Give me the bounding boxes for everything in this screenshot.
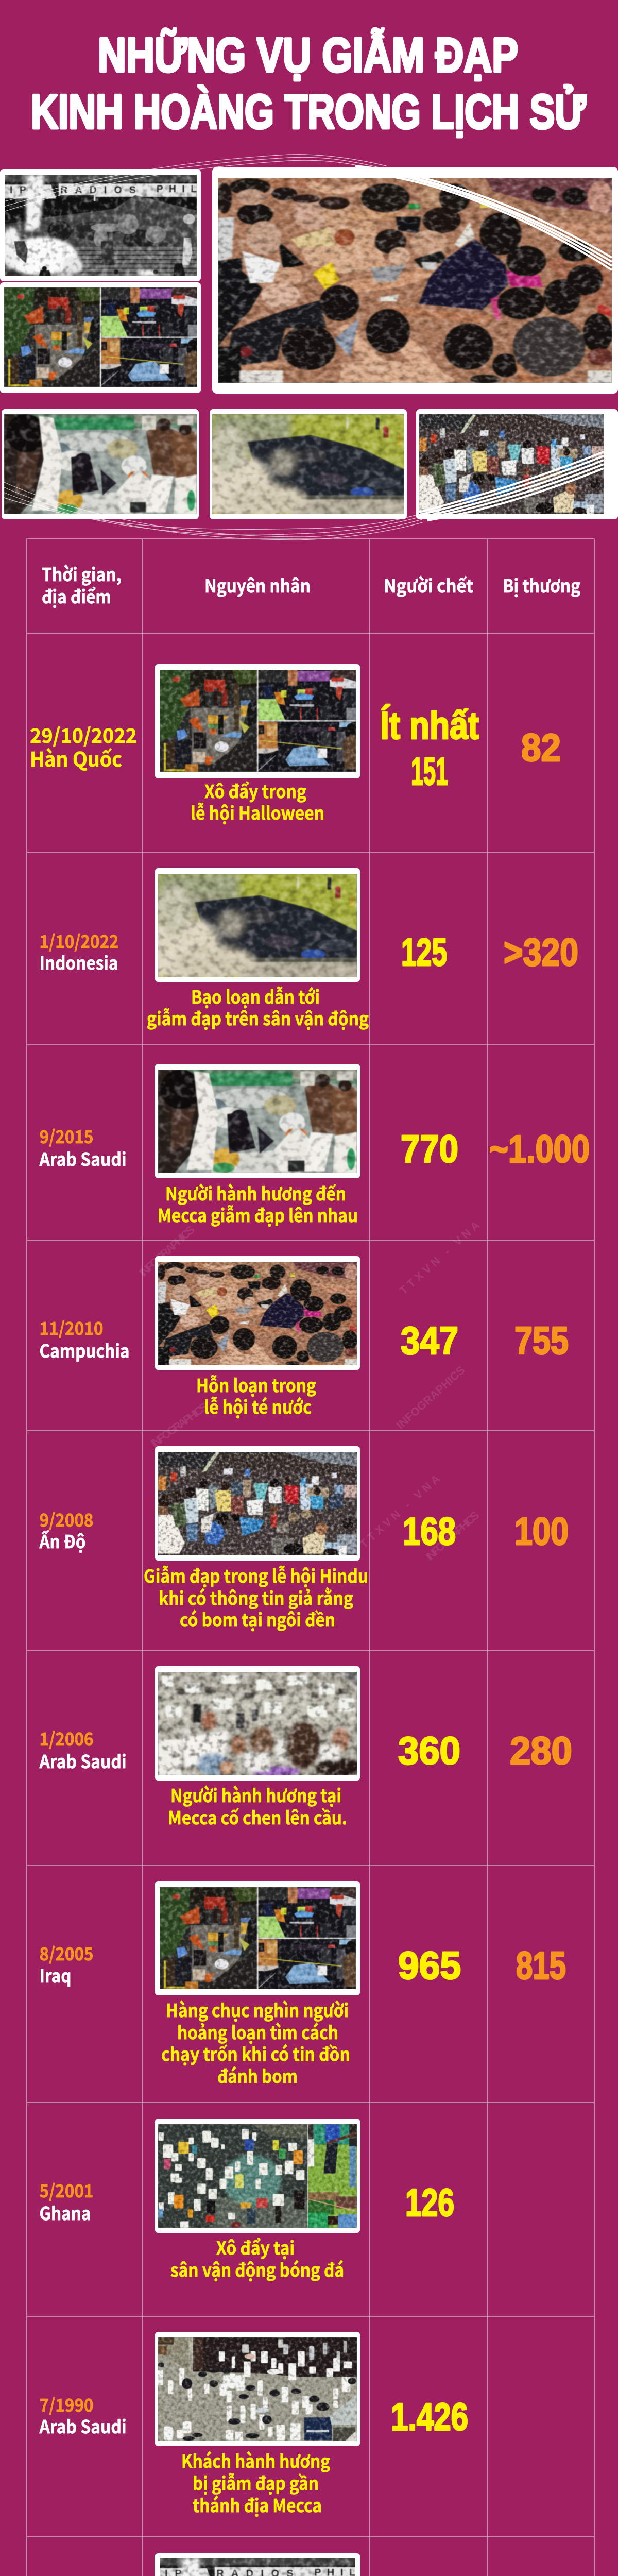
row: 11/2010 Campuchia: 347: [401, 1319, 458, 1362]
photo: [155, 1064, 360, 1178]
row: 7/1990 Arab Saudi: 1.426: [391, 2395, 468, 2438]
watermarks: INFOGRAPHICS: [137, 1223, 197, 1279]
photo: India crowd: [416, 409, 618, 519]
row: 5/2001 Ghana: Xô đẩy tại: [216, 2234, 295, 2260]
row: 8/2005 Iraq: 8/2005: [39, 1940, 94, 1966]
row: 9/2015 Arab Saudi: ~1.000: [489, 1127, 590, 1171]
photo: [155, 2553, 360, 2576]
table header: [42, 561, 580, 609]
row: 9/2008 Ấn Độ: [39, 1446, 569, 1632]
row: 8/2005 Iraq: [39, 1881, 566, 2089]
row: 1/2006 Arab Saudi: Người hành hương tại: [170, 1782, 341, 1808]
row: 5/2001 Ghana: 126: [405, 2181, 454, 2224]
photo: Mecca pilgrims: [2, 409, 199, 519]
row: 7/1990 Arab Saudi: Arab Saudi: [39, 2413, 126, 2439]
row: 8/2005 Iraq: 815: [516, 1944, 566, 1987]
photo: [155, 2332, 360, 2446]
row: 29/10/2022 Hàn Quốc: [30, 664, 561, 825]
row: 9/2015 Arab Saudi: Mecca giẫm đạp lên nhau: [158, 1201, 358, 1228]
photo: [155, 664, 360, 778]
row: 29/10/2022 Hàn Quốc: lễ hội Halloween: [191, 799, 324, 825]
row: 7/1990 Arab Saudi: [39, 2332, 468, 2518]
photo collage: [0, 167, 618, 519]
row: 9/2008 Ấn Độ: khi có thông tin giả rằng: [159, 1584, 353, 1611]
row: 8/2005 Iraq: chạy trốn khi có tin đồn: [161, 2040, 350, 2066]
row: 1/10/2022 Indonesia: Bạo loạn dẫn tới: [191, 983, 320, 1009]
photo: Cambodia crowd, large: [212, 167, 618, 394]
row: 1/2006 Arab Saudi: Arab Saudi: [39, 1748, 126, 1774]
row: 11/2010 Campuchia: 755: [514, 1319, 569, 1362]
row: 11/2010 Campuchia: [39, 1256, 569, 1419]
table header: Người chết: [384, 572, 473, 598]
row: 9/2008 Ấn Độ: 9/2008: [39, 1506, 94, 1532]
row: 9/2015 Arab Saudi: 770: [401, 1127, 458, 1171]
photo: Korea Halloween: [0, 282, 201, 393]
photo: [155, 1881, 360, 1995]
photo: Indonesia stadium: [198, 409, 407, 519]
row: 11/2010 Campuchia: Campuchia: [39, 1337, 130, 1363]
row: 1/2006 Arab Saudi: 360: [398, 1729, 460, 1772]
photo: [155, 1446, 360, 1561]
row: 29/10/2022 Hàn Quốc: 82: [521, 726, 561, 769]
row: 7/1990 Arab Saudi: Khách hành hương: [181, 2447, 330, 2473]
photo: Peru stadium: [0, 169, 201, 281]
row: 9/2015 Arab Saudi: Arab Saudi: [39, 1145, 126, 1172]
table header: địa điểm: [42, 583, 111, 609]
table grid: [27, 539, 594, 2576]
row: 9/2015 Arab Saudi: [39, 1064, 590, 1228]
row: 11/2010 Campuchia: 11/2010: [39, 1314, 103, 1341]
watermarks: TTXVN - VNA: [397, 1218, 482, 1297]
row: 1/10/2022 Indonesia: 125: [401, 930, 447, 974]
row: 1/10/2022 Indonesia: >320: [504, 930, 578, 974]
row: 29/10/2022 Hàn Quốc: 29/10/2022: [30, 720, 137, 749]
row: 7/1990 Arab Saudi: 7/1990: [39, 2391, 94, 2417]
row: 9/2015 Arab Saudi: Người hành hương đến: [165, 1180, 346, 1206]
table header: Nguyên nhân: [204, 572, 311, 598]
row: 9/2008 Ấn Độ: có bom tại ngôi đền: [180, 1606, 335, 1632]
watermarks: [137, 1218, 482, 1563]
row: 9/2008 Ấn Độ: Giẫm đạp trong lễ hội Hindu: [144, 1562, 368, 1588]
table header: Bị thương: [503, 572, 580, 598]
row: 5/2001 Ghana: Ghana: [39, 2199, 91, 2226]
row: 29/10/2022 Hàn Quốc: Ít nhất: [380, 704, 479, 747]
row: 7/1990 Arab Saudi: bị giẫm đạp gần: [193, 2469, 319, 2496]
row: 9/2008 Ấn Độ: 168: [403, 1510, 456, 1553]
row: 11/2010 Campuchia: lễ hội té nước: [204, 1393, 312, 1419]
row: 1/10/2022 Indonesia: giẫm đạp trên sân vận động: [147, 1005, 369, 1031]
row: 5/1964 Peru: [39, 2553, 573, 2576]
row: 1/2006 Arab Saudi: Mecca cố chen lên cầu.: [168, 1804, 347, 1830]
row: 9/2008 Ấn Độ: Ấn Độ: [39, 1528, 85, 1554]
watermarks: INFOGRAPHICS: [423, 1509, 482, 1563]
row: 1/2006 Arab Saudi: 280: [510, 1729, 572, 1772]
row: 9/2008 Ấn Độ: 100: [514, 1510, 569, 1553]
row: 5/2001 Ghana: sân vận động bóng đá: [170, 2256, 344, 2282]
photo: [155, 1666, 363, 1781]
watermarks: TTXVN - VNA: [357, 1472, 442, 1551]
row: 8/2005 Iraq: 965: [398, 1944, 461, 1987]
photo: [155, 2119, 360, 2233]
row: 29/10/2022 Hàn Quốc: Xô đẩy trong: [204, 777, 306, 804]
row: 29/10/2022 Hàn Quốc: Hàn Quốc: [30, 744, 122, 773]
row: 8/2005 Iraq: Iraq: [39, 1962, 71, 1988]
row: 5/2001 Ghana: 5/2001: [39, 2177, 94, 2203]
table header: Thời gian,: [42, 561, 122, 587]
row: 1/2006 Arab Saudi: 1/2006: [39, 1725, 94, 1751]
row: 7/1990 Arab Saudi: thánh địa Mecca: [193, 2492, 322, 2518]
title: NHỮNG VỤ GIẪM ĐẠP: [98, 27, 518, 82]
title: [31, 27, 586, 139]
row: 1/2006 Arab Saudi: [39, 1666, 572, 1830]
photo: [155, 1256, 360, 1370]
row: 1/10/2022 Indonesia: 1/10/2022: [39, 927, 118, 954]
row: 8/2005 Iraq: Hàng chục nghìn người: [166, 1996, 349, 2023]
row: 8/2005 Iraq: đánh bom: [217, 2062, 298, 2089]
row: 1/10/2022 Indonesia: Indonesia: [39, 949, 118, 975]
row: 1/10/2022 Indonesia: [39, 868, 578, 1031]
row: 29/10/2022 Hàn Quốc: 151: [411, 750, 448, 793]
row: 9/2015 Arab Saudi: 9/2015: [39, 1123, 94, 1149]
row: 5/2001 Ghana: [39, 2119, 454, 2282]
watermarks: INFOGRAPHICS: [394, 1363, 468, 1432]
row: 8/2005 Iraq: hoảng loạn tìm cách: [177, 2019, 338, 2045]
watermarks: INFOGRAPHICS: [148, 1400, 210, 1450]
photo: [144, 868, 360, 982]
row: 11/2010 Campuchia: Hỗn loạn trong: [196, 1371, 316, 1398]
